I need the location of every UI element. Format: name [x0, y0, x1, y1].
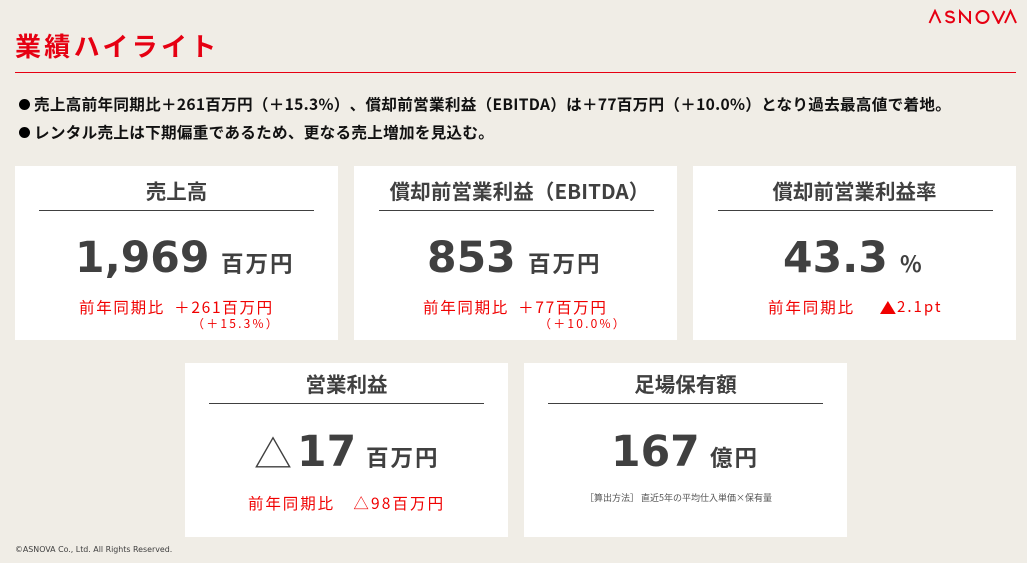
value: 167: [611, 428, 700, 477]
title: 業績ハイライト: [15, 27, 220, 64]
panel: EBITDA: [354, 166, 677, 340]
panel: 足場保有額: [524, 363, 847, 537]
panel: 償却前営業利益率: [693, 166, 1016, 340]
comparison percent: （＋10.0%）: [539, 315, 627, 332]
copyright: ©ASNOVA Co., Ltd. All Rights Reserved.: [15, 545, 172, 554]
value: 853: [427, 234, 516, 283]
bullet 2: レンタル売上は下期偏重であるため、更なる売上増加を見込む。: [34, 121, 494, 143]
panel: 売上高: [15, 166, 338, 340]
comparison: 前年同期比 △98百万円: [248, 492, 445, 514]
panel: 営業利益: [185, 363, 508, 537]
value: 1,969: [75, 234, 209, 283]
unit: 億円: [710, 441, 759, 473]
value: [254, 424, 356, 479]
heading: 償却前営業利益率: [772, 175, 936, 205]
unit: 百万円: [221, 246, 295, 278]
comparison: 前年同期比: [768, 296, 855, 318]
value: △: [254, 424, 292, 479]
bullet 1: 売上高前年同期比＋261百万円（＋15.3%）、償却前営業利益（EBITDA）は＋77百万円（＋10.0%）となり過去最高値で着地。: [34, 93, 951, 115]
value: 17: [297, 428, 356, 477]
method note: ［算出方法］ 直近5年の平均仕入単価×保有量: [585, 491, 772, 504]
bullet points: [19, 93, 951, 143]
comparison percent: （＋15.3%）: [192, 315, 280, 332]
unit: 百万円: [528, 246, 602, 278]
comparison triangle: ▲: [880, 295, 898, 319]
unit: %: [900, 246, 924, 278]
title rule: [15, 72, 1016, 73]
logo: ASNOVA: [928, 9, 1017, 24]
heading: 売上高: [146, 175, 207, 205]
value: 43.3: [783, 234, 888, 283]
unit: 百万円: [366, 441, 440, 473]
comparison: 前年同期比 ＋261百万円: [79, 296, 274, 318]
heading: 足場保有額: [634, 368, 737, 398]
comparison value: 2.1pt: [897, 296, 942, 317]
heading: 償却前営業利益（EBITDA）: [390, 175, 649, 205]
heading: 営業利益: [306, 368, 388, 398]
comparison: 前年同期比 ＋77百万円: [423, 296, 608, 318]
